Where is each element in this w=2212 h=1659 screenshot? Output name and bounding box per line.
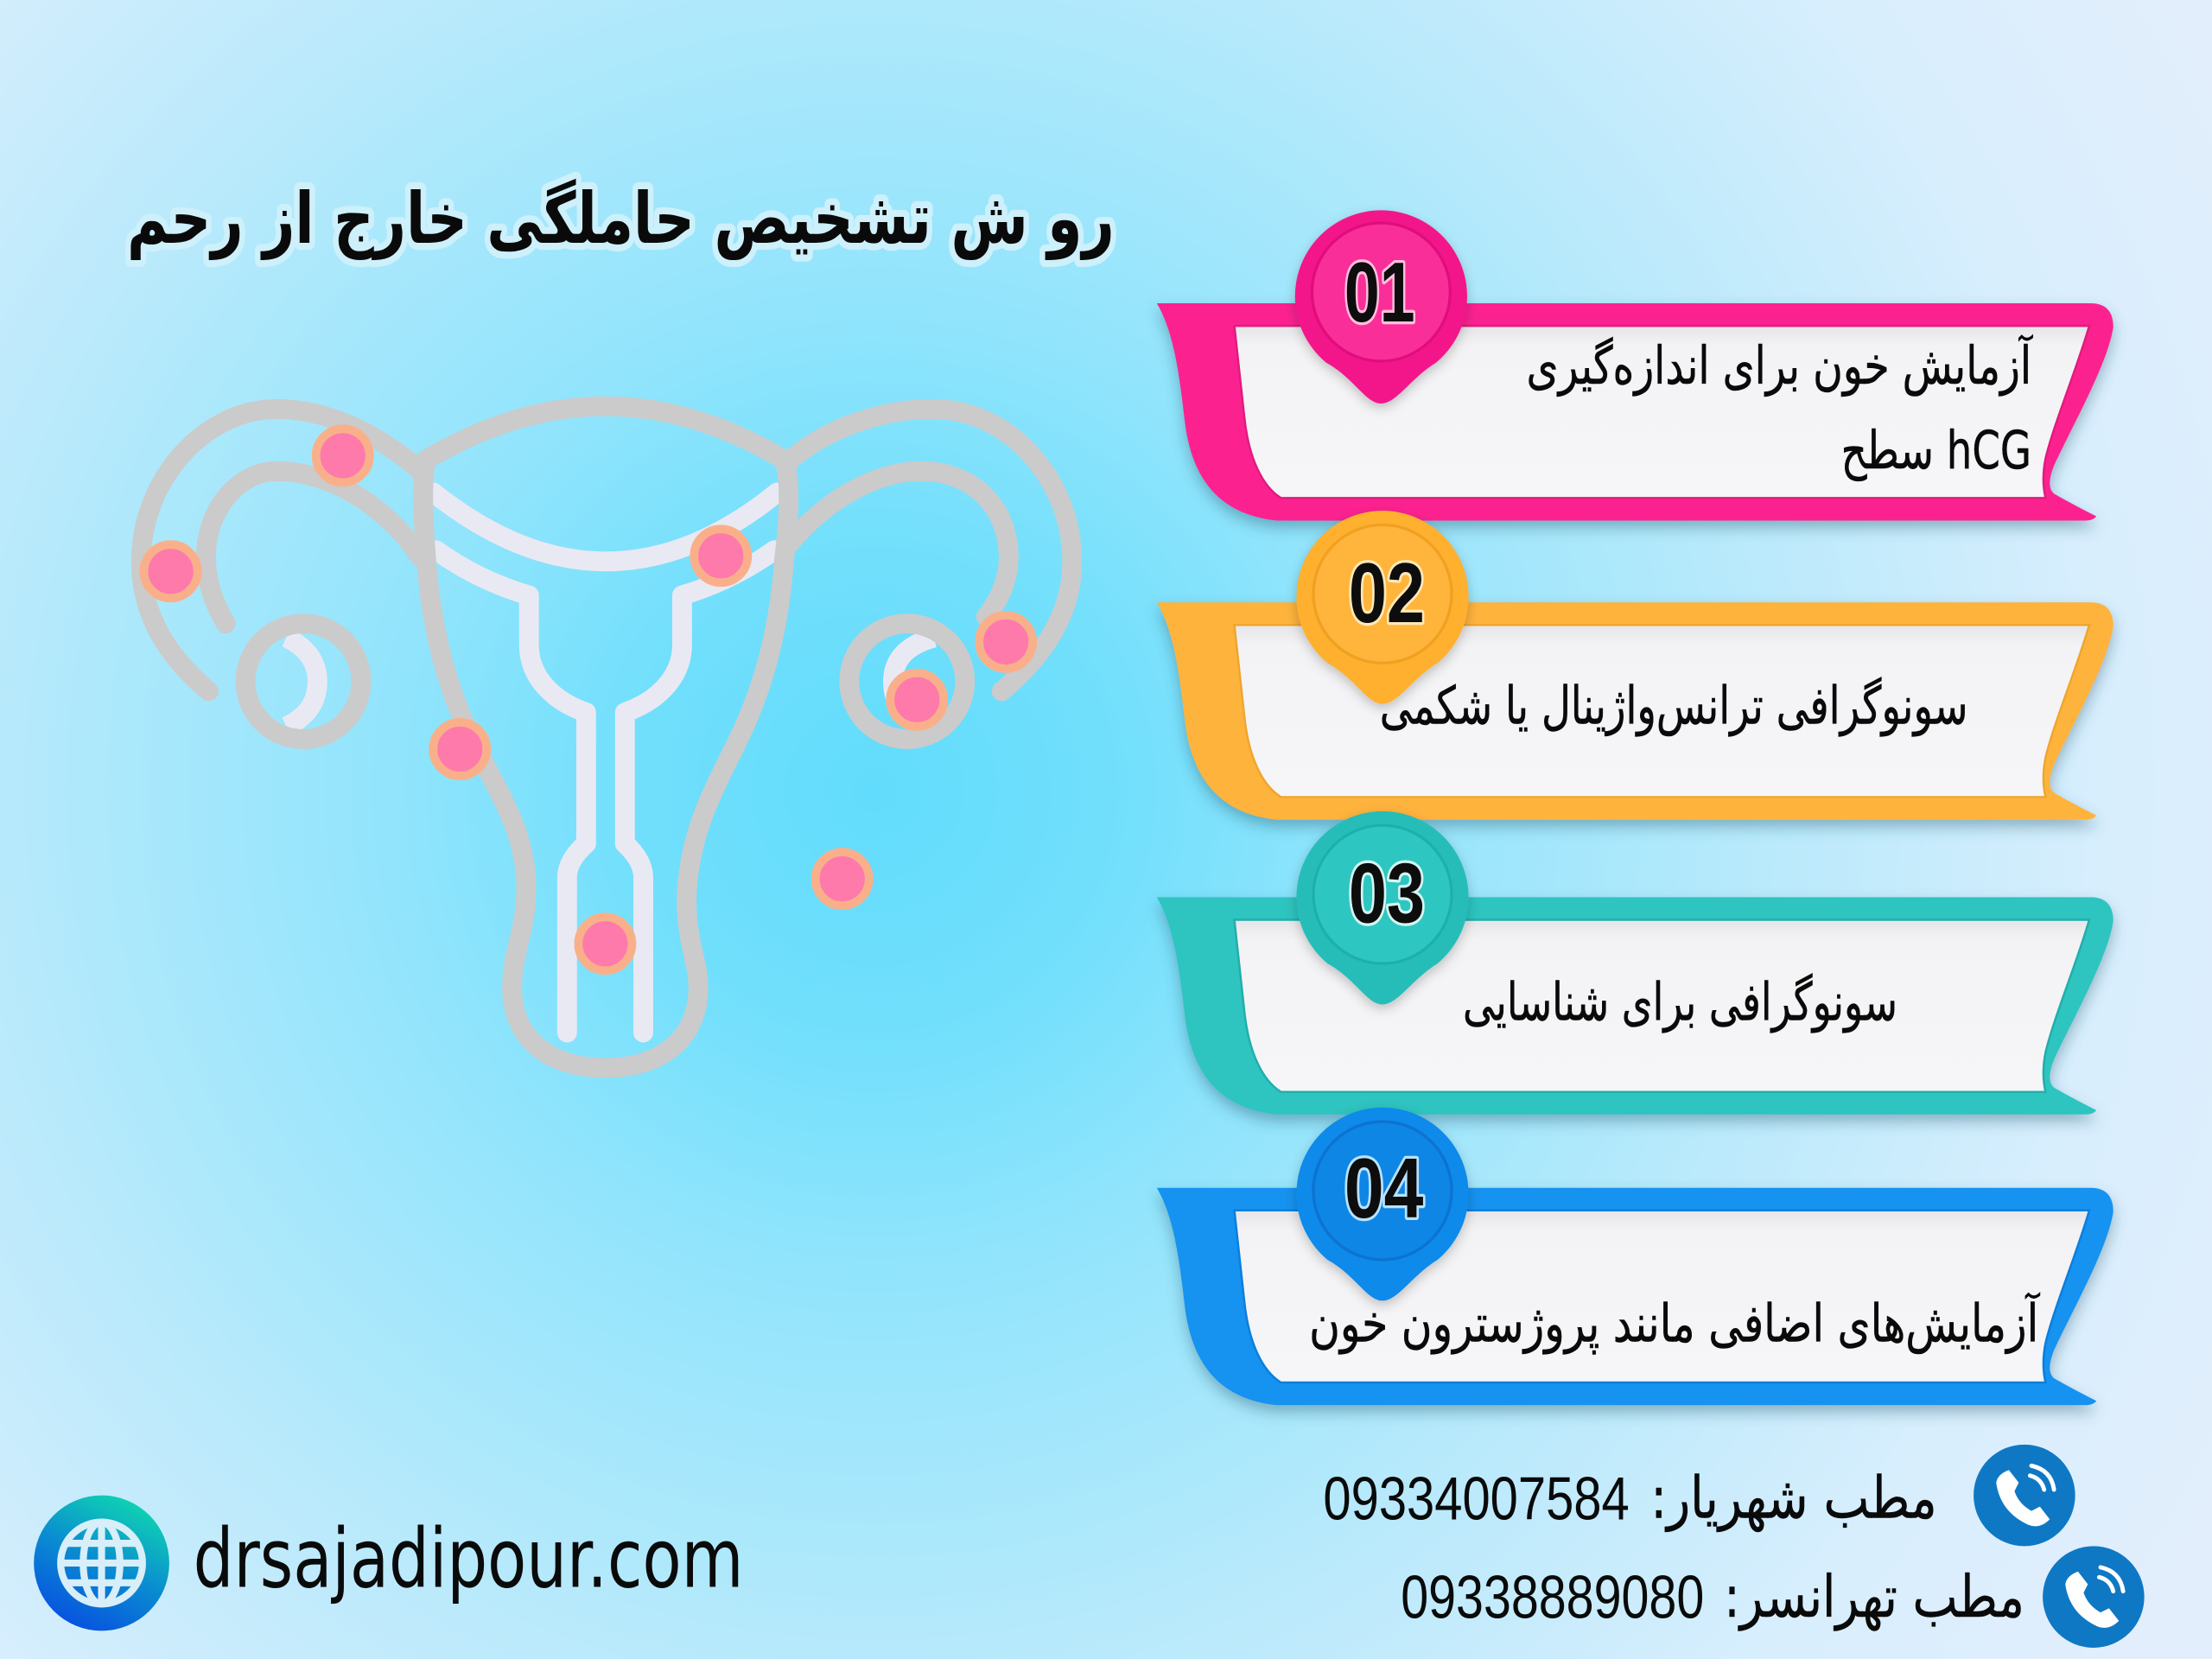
text block: آزمایش‌های اضافی مانند پروژسترون خون bbox=[1309, 1293, 2041, 1355]
panel: step 3 bbox=[1157, 811, 2113, 1115]
icon: phone bbox=[1974, 1445, 2075, 1546]
contact: Shahriar office bbox=[1323, 1445, 2075, 1546]
pin 01 bbox=[1295, 210, 1467, 404]
banner frame bbox=[1157, 303, 2113, 520]
text block: آزمایش خون برای اندازه‌گیری bbox=[1527, 334, 2034, 397]
inner cavity lines bbox=[286, 493, 934, 1033]
icon: globe bbox=[34, 1496, 169, 1630]
pink marker dots bbox=[144, 429, 1033, 970]
panel: step 4 bbox=[1157, 1108, 2113, 1405]
text block: سونوگرافی برای شناسایی bbox=[1463, 972, 1897, 1033]
label: مطب تهرانسر: bbox=[1724, 1563, 2024, 1631]
banner frame bbox=[1157, 897, 2113, 1115]
website address: drsajadipour.com bbox=[194, 1512, 743, 1607]
banner frame bbox=[1157, 1188, 2113, 1405]
pin 02 bbox=[1296, 511, 1469, 704]
title: رو ش تشخیص حاملگی خارج از رحم bbox=[127, 178, 1115, 261]
label: مطب شهریار: bbox=[1650, 1465, 1937, 1533]
pin 01: 01 bbox=[1344, 245, 1415, 340]
panel: step 1 bbox=[1157, 210, 2113, 520]
uterus illustration bbox=[141, 406, 1072, 1068]
banner frame bbox=[1157, 602, 2113, 820]
pin 03 bbox=[1296, 811, 1469, 1004]
pin 04: 04 bbox=[1344, 1141, 1423, 1236]
grey organ outline bbox=[141, 406, 1072, 1068]
pin 04 bbox=[1296, 1108, 1469, 1300]
text block: سونوگرافی ترانس‌واژینال یا شکمی bbox=[1380, 677, 1968, 737]
contact: Tehransar office bbox=[1401, 1546, 2145, 1648]
pin 03: 03 bbox=[1349, 846, 1425, 941]
phone number: 09334007584 bbox=[1323, 1464, 1630, 1532]
icon: phone bbox=[2043, 1546, 2145, 1648]
pin 02: 02 bbox=[1349, 545, 1425, 640]
phone number: 09338889080 bbox=[1401, 1563, 1704, 1631]
text block line 2: hCG سطح bbox=[1841, 421, 2031, 481]
panel: step 2 bbox=[1157, 511, 2113, 820]
